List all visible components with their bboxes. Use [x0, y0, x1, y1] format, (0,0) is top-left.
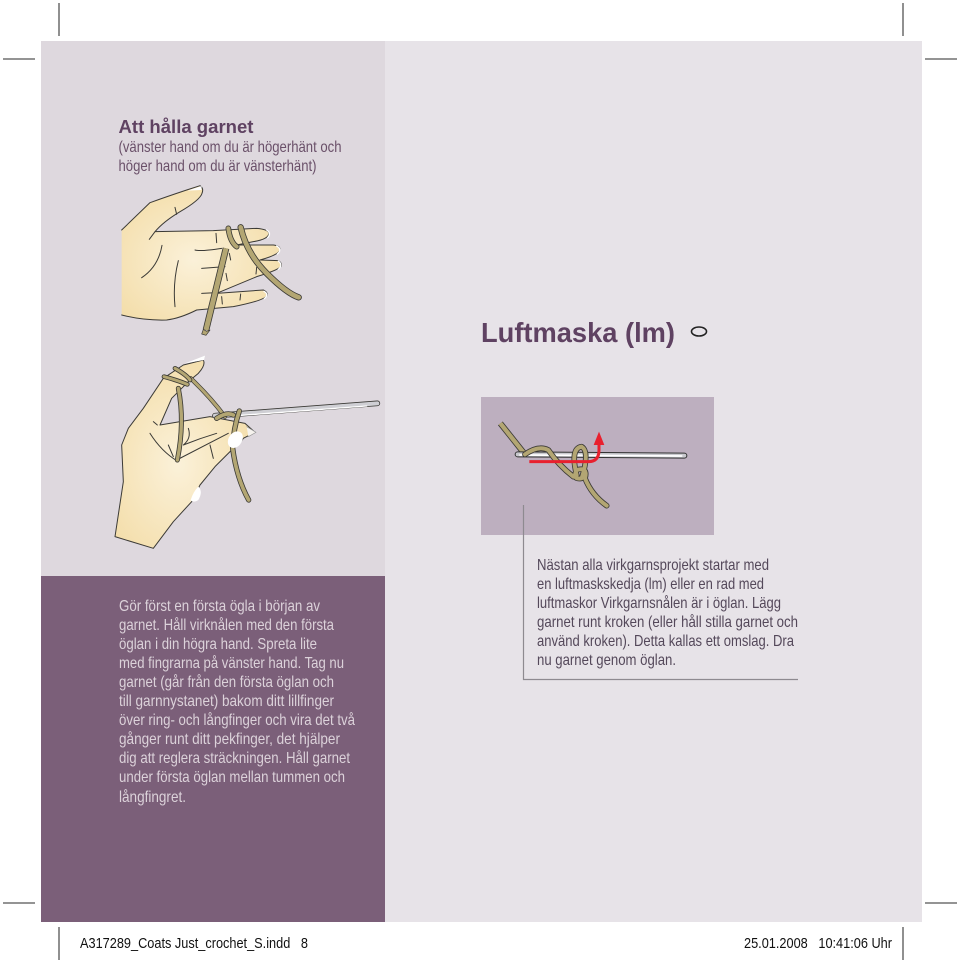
body text: holding instructions: garnet (går från den första öglan och	[119, 673, 334, 691]
subheading text block	[118, 139, 342, 175]
body text: holding instructions: under första öglan mellan tummen och	[119, 769, 345, 786]
body text: holding instructions: öglan i din högra hand. Spreta lite	[119, 636, 317, 653]
footer: file name: A317289_Coats Just_crochet_S.indd 8	[80, 935, 308, 952]
panel: right page background	[385, 41, 922, 922]
body text: holding instructions: över ring- och långfinger och vira det två	[119, 711, 355, 729]
heading: holding the yarn: Att hålla garnet	[118, 117, 254, 137]
body text: chain stitch instructions: använd kroken). Detta kallas ett omslag. Dra	[537, 633, 794, 650]
panel: left illustrations background	[41, 41, 385, 576]
body text: holding instructions: med fingrarna på vänster hand. Tag nu	[119, 654, 344, 672]
yarn tail	[500, 423, 525, 454]
body text: holding instructions: långfingret.	[119, 788, 186, 806]
subheading text block: höger hand om du är vänsterhänt)	[118, 158, 316, 175]
title: Luftmaska: Luftmaska (lm)	[481, 317, 675, 348]
body text: chain stitch instructions: en luftmaskskedja (lm) eller en rad med	[537, 576, 764, 593]
illustration: open hand with yarn	[122, 186, 299, 335]
subheading text block: (vänster hand om du är högerhänt och	[118, 139, 342, 156]
footer: date and time: 25.01.2008 10:41:06 Uhr	[744, 935, 892, 952]
icon: chain stitch symbol	[692, 327, 706, 336]
body text: chain stitch instructions: garnet runt kroken (eller håll stilla garnet och	[537, 613, 798, 631]
red arrow	[529, 432, 604, 462]
panel: left text background	[41, 576, 385, 922]
body text: chain stitch instructions: Nästan alla virkgarnsprojekt startar med	[537, 557, 769, 574]
body text: holding instructions: gånger runt ditt pekfinger, det hjälper	[119, 730, 341, 748]
callout leader line	[524, 505, 798, 680]
yarn loops	[525, 447, 607, 506]
body text: holding instructions	[119, 598, 355, 806]
body text: holding instructions: Gör först en första ögla i början av	[119, 598, 320, 615]
illustration panel: chain stitch on hook	[481, 397, 714, 535]
illustration: hand holding hook and yarn	[115, 356, 377, 548]
body text: chain stitch instructions	[537, 557, 798, 669]
body text: chain stitch instructions: nu garnet genom öglan.	[537, 652, 676, 669]
body text: holding instructions: till garnnystanet) bakom ditt lillfinger	[119, 693, 335, 710]
crochet hook	[518, 454, 684, 456]
body text: holding instructions: dig att reglera sträckningen. Håll garnet	[119, 749, 350, 767]
body text: chain stitch instructions: luftmaskor Virkgarnsnålen är i öglan. Lägg	[537, 594, 781, 612]
body text: holding instructions: garnet. Håll virknålen med den första	[119, 616, 334, 634]
